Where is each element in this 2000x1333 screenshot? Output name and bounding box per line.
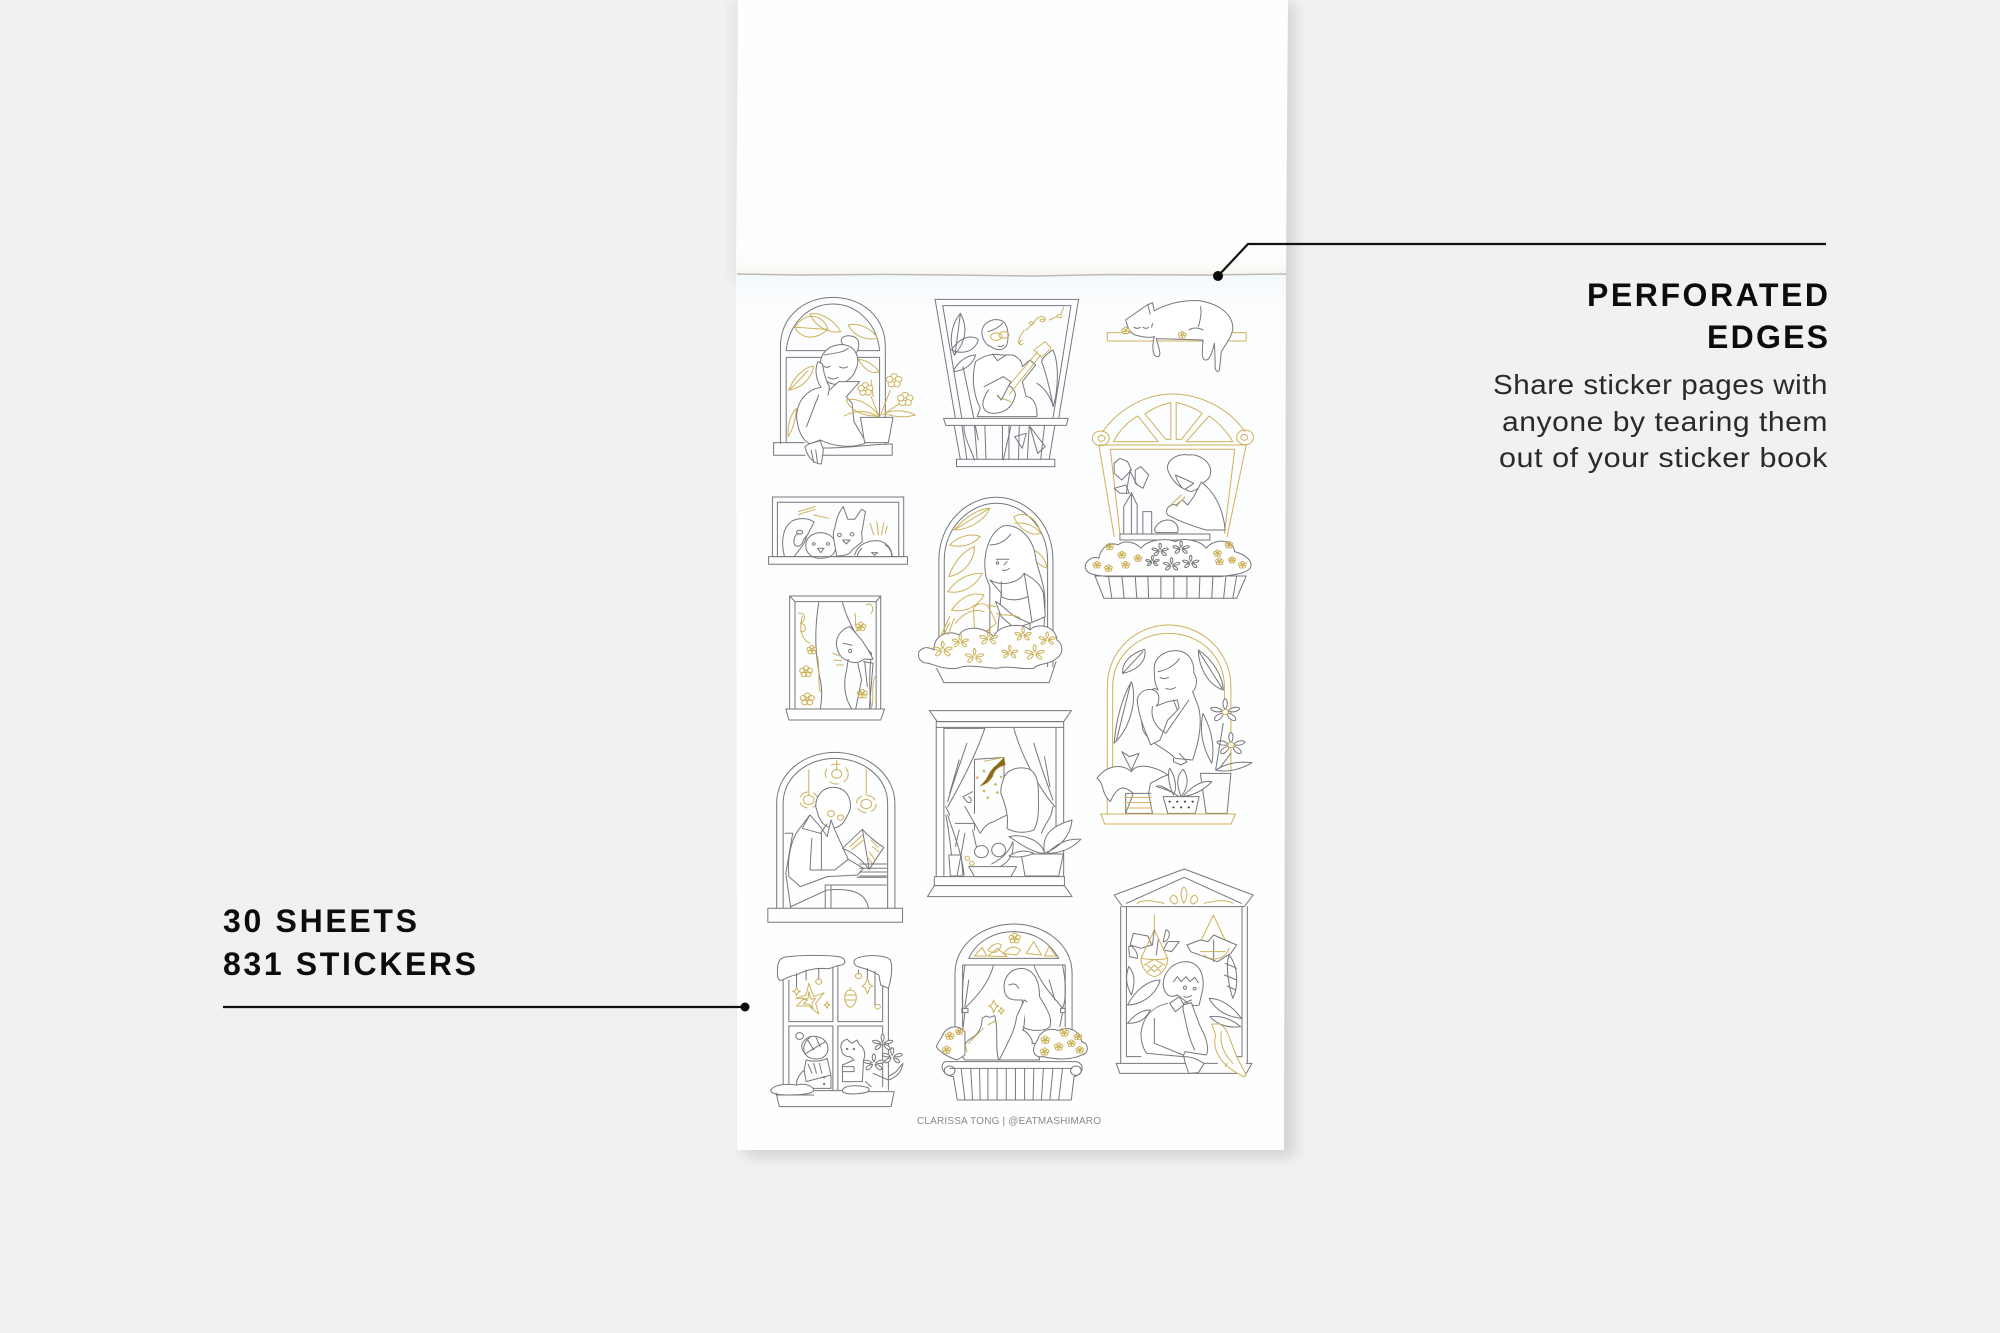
sticker: cat sleeping on shelf [1107, 301, 1246, 371]
callout heading: perforated edges: EDGES [1707, 319, 1828, 355]
torn-away top pad with perforated edge [736, 0, 1288, 276]
callout text: perforated edges description [1493, 369, 1829, 473]
sticker: woman with hanging plants and bird at window [1114, 869, 1253, 1077]
sticker: gold arched window with flower box [1085, 394, 1253, 598]
callout heading: perforated edges [1587, 277, 1828, 355]
sticker: woman painting, curtained window [927, 711, 1081, 897]
callout heading: perforated edges: PERFORATED [1587, 277, 1828, 313]
sticker: person peeking through curtains, vine window [786, 596, 885, 720]
sticker: barking dogs at window [769, 497, 908, 564]
callout heading: sheets and stickers count: 831 STICKERS [223, 946, 476, 982]
sticker: man playing ukulele on balcony [935, 299, 1079, 467]
callout heading: sheets and stickers count [223, 903, 476, 982]
sticker: man reading in arched window [768, 752, 903, 922]
sheet credit text: CLARISSA TONG | @EATMASHIMARO [917, 1116, 1101, 1127]
sticker: winter window with snowman and corgi [771, 955, 903, 1107]
sticker: woman resting at arched window [774, 297, 915, 464]
sticker: woman watering flowers at arched window [919, 497, 1062, 683]
callout text: perforated edges description: anyone by tearing them [1502, 406, 1828, 437]
sticker: girl and cat at arched window with planter [936, 924, 1087, 1100]
sticker sheet [736, 270, 1286, 1150]
callout heading: sheets and stickers count: 30 SHEETS [223, 903, 417, 939]
callout: sheets leader line [223, 1002, 750, 1012]
pad and sheet shadows [728, 0, 1295, 1157]
callout text: perforated edges description: Share sticker pages with [1493, 369, 1828, 400]
sticker: mother and baby in gold arched window [1097, 625, 1252, 824]
callout: perforated edges leader line [1213, 244, 1826, 281]
callout text: perforated edges description: out of your sticker book [1499, 442, 1829, 473]
